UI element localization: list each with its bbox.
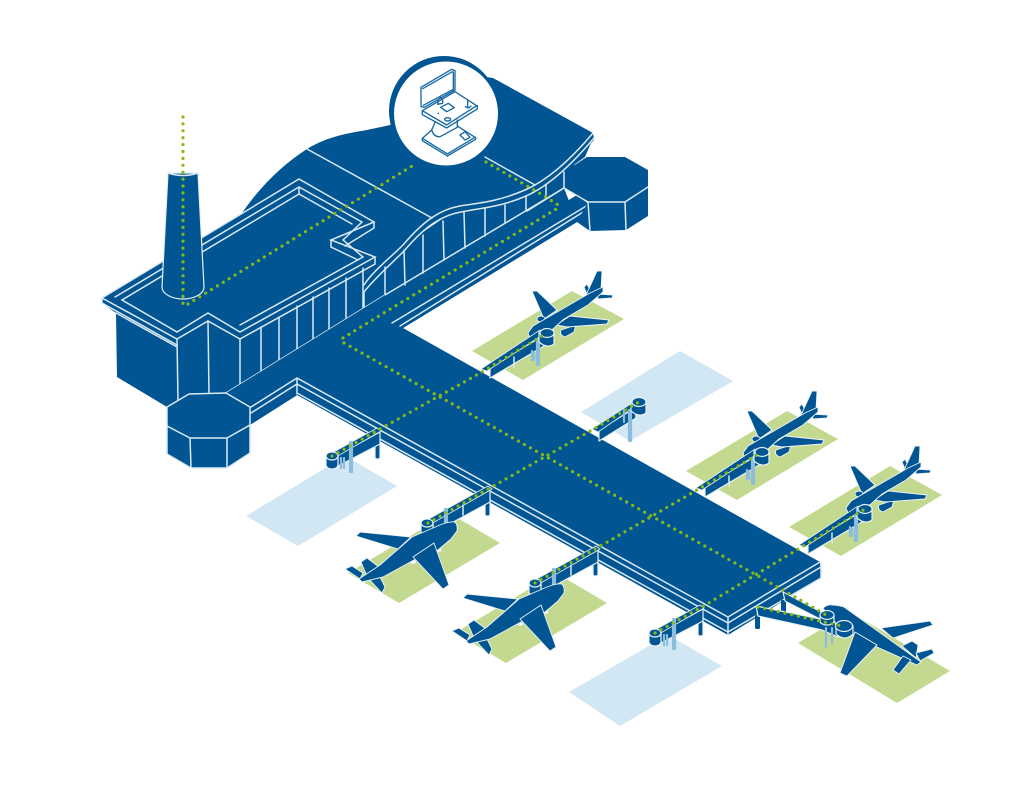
airplane: end of pier <box>823 605 934 676</box>
dotted network route <box>183 117 865 633</box>
jet bridge: north gate 3 <box>799 504 872 554</box>
strip underside leading to north octagon <box>385 195 590 328</box>
curved upper roof <box>242 70 594 310</box>
vertical tower route <box>181 117 185 305</box>
flat roof rim lines <box>102 179 375 332</box>
curved roof edge lines <box>364 133 593 285</box>
octagon edge lines <box>167 393 250 468</box>
apron: green stand north 2 <box>686 411 838 500</box>
lower left wall lines <box>116 268 363 400</box>
octagon edge lines <box>527 172 648 231</box>
lower wall base line <box>226 188 564 393</box>
jet bridge: north empty stand <box>592 398 646 441</box>
pier side face <box>250 378 821 635</box>
octagon tower south-west <box>167 393 250 468</box>
jet bridge: south gate 2 <box>529 546 600 596</box>
building body and walls <box>102 179 577 425</box>
octagon tower north-east <box>527 157 648 231</box>
callout white disc <box>394 62 498 166</box>
apron: blue empty stand south <box>569 635 722 726</box>
roof section lines <box>307 149 535 218</box>
route along roof <box>188 166 412 304</box>
terminal building <box>102 70 594 425</box>
callout navy ring <box>389 56 499 166</box>
tower top arc <box>168 173 198 176</box>
apron: green stand end of pier <box>798 612 950 703</box>
airplane: south gate 2 <box>452 584 564 655</box>
apron: green stand south 2 <box>455 573 607 663</box>
octagon body <box>564 157 648 231</box>
control tower chimney <box>162 173 204 299</box>
route around curved roof and down north strip <box>338 162 558 341</box>
jet bridge: south-west empty stand <box>326 428 381 472</box>
jet bridge: north gate 2 <box>696 448 769 497</box>
cross route D <box>655 509 865 633</box>
jet bridge: south gate 1 <box>421 486 492 536</box>
north strip lines <box>392 205 588 326</box>
octagon body <box>167 393 250 468</box>
airplane: north gate 1 <box>528 271 613 338</box>
concourse pier <box>226 205 821 635</box>
jet bridge: north gate 1 <box>481 328 554 378</box>
route to end bridge <box>758 607 842 626</box>
apron: blue empty stand west <box>246 456 397 546</box>
jet bridges: end of pier <box>755 592 853 647</box>
pier top surface <box>226 295 820 617</box>
jet bridge: south empty stand <box>649 605 704 649</box>
apron: green stand north 1 <box>472 291 624 380</box>
apron: green stand south 1 <box>348 513 500 603</box>
wall panel lines under curved roof <box>385 185 546 296</box>
curved wall infill <box>360 136 594 320</box>
cross route A <box>332 333 547 456</box>
icon: check-in kiosk <box>421 69 477 156</box>
cross route B <box>428 402 639 523</box>
airplane: north gate 2 <box>743 391 828 458</box>
apron: blue empty stand north <box>581 351 733 441</box>
callout circle with kiosk <box>389 56 499 166</box>
airplane: north gate 3 <box>846 446 931 513</box>
tower body <box>162 173 204 299</box>
cross route C <box>535 452 762 583</box>
apron: green stand north 3 <box>789 466 942 556</box>
airplane: south gate 1 <box>345 522 457 593</box>
pier edge lines <box>251 378 821 635</box>
route along pier <box>344 343 826 615</box>
